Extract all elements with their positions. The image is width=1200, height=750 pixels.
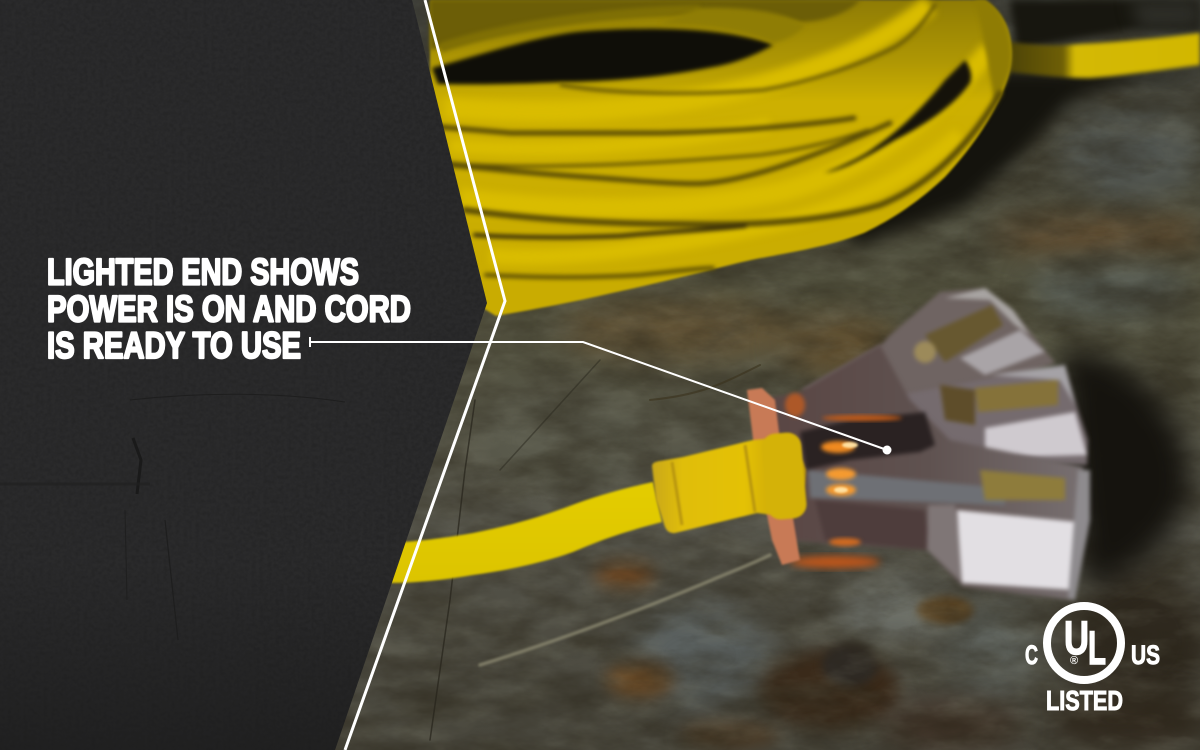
hole in the coil: [432, 29, 773, 84]
headline text: LIGHTED END SHOWS: [47, 252, 359, 292]
reflected glow on floor: [790, 556, 880, 568]
main body: [770, 345, 1090, 600]
headline text: [47, 252, 411, 366]
plug lamp glow: [785, 393, 902, 546]
white chevron outline: [345, 0, 505, 750]
UL listed certification mark: L: [1088, 621, 1106, 674]
right-hand dark wedge: [824, 60, 971, 173]
coiled yellow cord: [430, 0, 1012, 316]
UL listed certification mark: US: [1131, 640, 1160, 670]
yellow strain relief collar: [652, 431, 808, 533]
top outlet: [800, 288, 1055, 410]
strand highlights: [445, 5, 990, 257]
UL listed certification mark: LISTED: [1046, 685, 1123, 716]
UL listed certification mark: C: [1025, 640, 1038, 670]
UL listed certification mark: U: [1064, 611, 1089, 664]
upper back strands: [430, 0, 860, 50]
floor rust and wear patches: [480, 110, 1200, 750]
orange flange: [747, 388, 800, 565]
middle outlet: [900, 365, 1088, 465]
headline text: IS READY TO USE: [47, 325, 301, 366]
floor scratches: [430, 360, 770, 740]
headline text: POWER IS ON AND CORD: [47, 288, 411, 330]
yellow cord to plug: [390, 482, 662, 583]
UL listed certification mark: ®: [1070, 655, 1078, 667]
lighted three-way plug: [652, 288, 1090, 600]
callout leader line to lighted end: [310, 337, 892, 454]
UL listed certification mark: [1025, 606, 1160, 716]
cord tail top right: [1010, 33, 1200, 78]
dark backdrop behind coil: [800, 0, 1200, 245]
cord strand creases: [440, 5, 1000, 277]
dark angled text panel: [0, 0, 500, 750]
shadow beside plug: [1060, 350, 1190, 590]
